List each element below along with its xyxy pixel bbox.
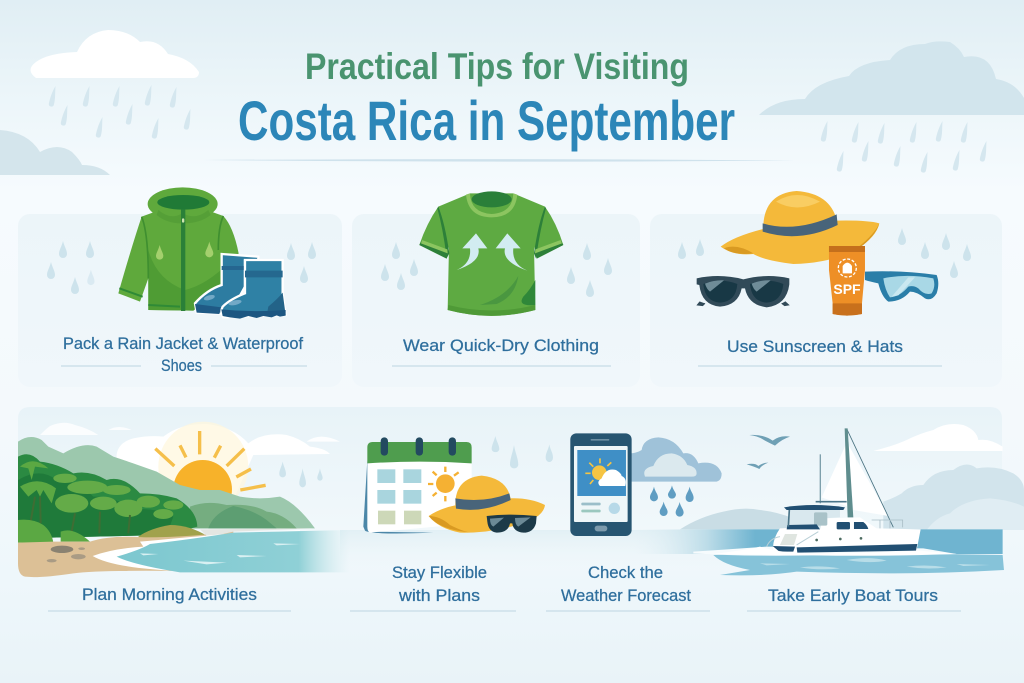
label: stay flexible: Stay Flexible — [392, 564, 487, 582]
label: plan morning activities: Plan Morning Activities — [82, 586, 257, 604]
sunglasses — [487, 515, 537, 533]
icon: green t-shirt — [419, 191, 563, 316]
label: stay flexible: with Plans — [398, 587, 480, 605]
icon: grey rain cloud top right — [759, 41, 1024, 173]
sea — [93, 530, 300, 572]
foam — [713, 547, 957, 555]
band of sea haze — [340, 530, 760, 575]
hull — [693, 547, 957, 556]
scene: boat on the sea — [633, 424, 1024, 575]
icon: phone with weather forecast and rain cloud — [570, 433, 722, 536]
rain drops — [47, 241, 316, 294]
rain drops between calendar and phone — [492, 436, 553, 468]
title divider — [203, 159, 795, 162]
rain drops — [381, 242, 612, 297]
drops — [279, 462, 323, 487]
back hills — [18, 437, 315, 528]
icon: sun hat, sunglasses, SPF tube and goggles: SPF — [833, 281, 861, 297]
jungle — [18, 454, 197, 538]
label — [63, 335, 303, 375]
SPF tube — [829, 246, 865, 316]
panel: sunscreen and hats — [650, 191, 1002, 387]
label: Shoes — [161, 357, 202, 375]
panel: bottom activities band — [18, 407, 1002, 585]
label: Use Sunscreen & Hats — [727, 338, 903, 356]
phone — [570, 433, 632, 536]
label: Pack a Rain Jacket & Waterproof — [63, 335, 303, 353]
sails — [822, 445, 848, 507]
beach — [18, 530, 233, 577]
birds — [747, 435, 790, 469]
rain drops — [678, 228, 971, 278]
sunglasses — [697, 276, 789, 307]
cabin — [788, 510, 840, 529]
icon: white rain cloud top left — [30, 30, 199, 139]
scene: morning beach — [18, 422, 350, 577]
label: early boat tours: Take Early Boat Tours — [768, 587, 938, 605]
title: Practical Tips for Visiting — [305, 46, 689, 87]
hat — [429, 498, 545, 533]
icon: green jacket — [118, 187, 286, 319]
panel: quick-dry clothing — [352, 191, 640, 387]
icon: sun hat, sunglasses, SPF tube and goggles — [697, 191, 938, 316]
clouds — [40, 423, 340, 500]
icon: calendar, sun, hat and sunglasses — [363, 437, 545, 533]
back boot — [195, 254, 258, 314]
label: Wear Quick-Dry Clothing — [403, 337, 599, 355]
label: stay flexible — [350, 564, 516, 611]
label: check weather forecast: Weather Forecast — [561, 587, 691, 605]
icon: grey cloud left — [0, 130, 110, 175]
label: check weather forecast — [546, 564, 710, 611]
goggles — [865, 271, 938, 302]
label: check weather forecast: Check the — [588, 564, 663, 582]
sun — [173, 460, 232, 519]
cloud — [630, 437, 722, 482]
title: Costa Rica in September — [238, 89, 735, 152]
title — [238, 46, 735, 152]
clouds — [873, 424, 1003, 451]
front boot — [221, 260, 286, 317]
panel: rain jacket and waterproof shoes — [18, 187, 342, 387]
sea — [633, 529, 1003, 554]
